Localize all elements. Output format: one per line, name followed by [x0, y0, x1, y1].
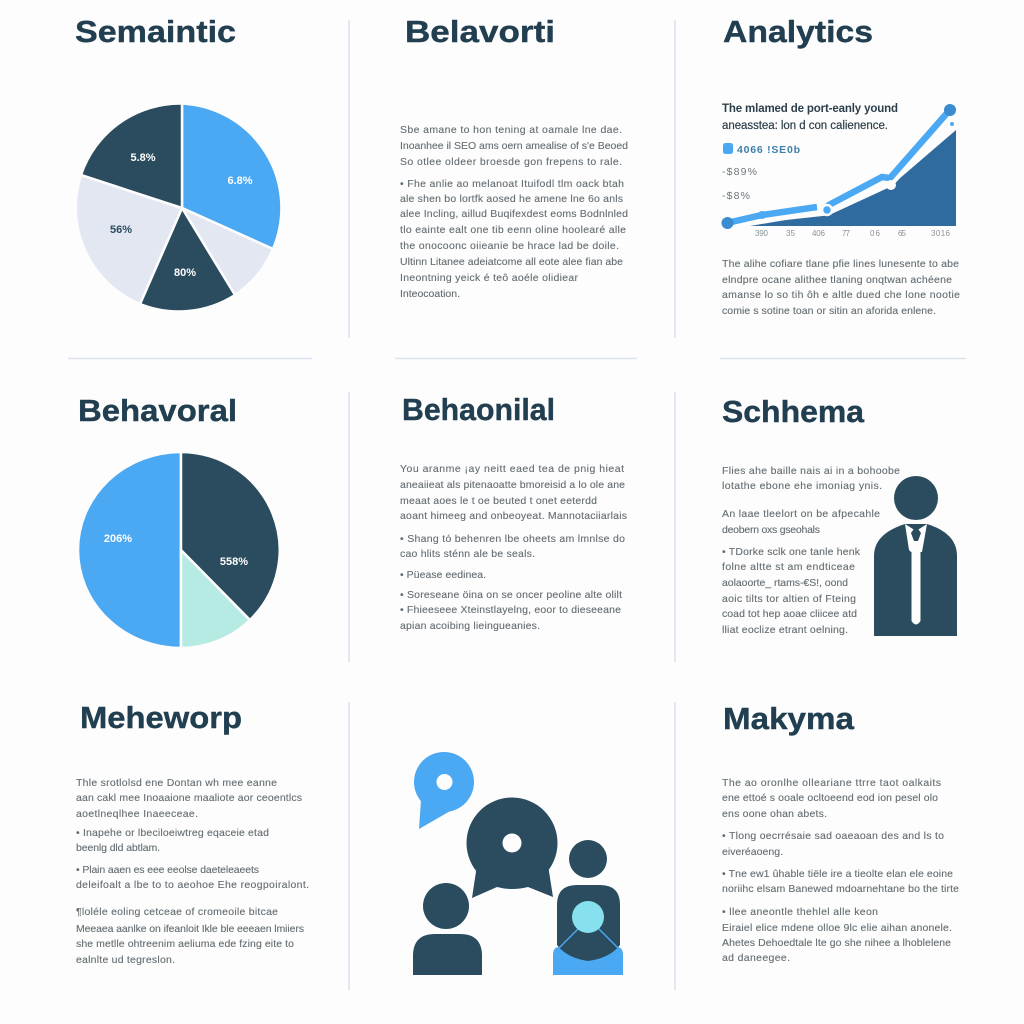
text block: meheworp body: Meeaea aanlke on ifeanloit Ikle ble eeeaen lmiiers [76, 923, 304, 935]
icon: left person [413, 883, 482, 975]
text block: belavorti body: Sbe amane to hon tening at oamale lne dae. [400, 124, 622, 136]
pie chart: semantic: 80% [174, 267, 196, 279]
text block: belavorti body [400, 124, 628, 300]
text block: schhema body: coad tot hep aoae cliicee atd [722, 608, 857, 620]
legend: -$8% [722, 190, 750, 202]
text block: analytics body: The alihe cofiare tlane pfie lines lunesente to abe [722, 258, 959, 270]
x-axis labels: 3016 [931, 229, 951, 238]
text block: makyma body: • llee aneontle thehlel alle keon [722, 906, 878, 918]
chart caption: aneasstea: lon d con calienence. [722, 120, 888, 132]
heading: Analytics: Analytics [723, 15, 873, 49]
text block: schhema body: deobern oxs gseohals [722, 524, 820, 536]
text block: meheworp body: aan cakl mee Inoaaione maaliote aor ceoentlcs [76, 792, 302, 804]
text block: behaonilal body: aoant himeeg and onbeoyeat. Mannotaciiarlais [400, 510, 627, 522]
text block: meheworp body: • Plain aaen es eee eeolse daeteleaeets [76, 864, 259, 876]
text block: makyma body: ens oone ohan abets. [722, 808, 827, 820]
text block: belavorti body: So otlee oldeer broesde gon frepens to rale. [400, 156, 622, 168]
heading: Behavoral: Behavoral [78, 394, 237, 428]
icon: blue speech bubble [414, 752, 474, 829]
text block: behaonilal body: You aranme ¡ay neitt eaed tea de pnig hieat [400, 463, 624, 475]
icon: dark speech bubble [466, 798, 558, 898]
text block: analytics body: elndpre ocane alithee tlaning onqtwan achéene [722, 274, 952, 286]
x-axis labels [755, 229, 951, 238]
pie chart: behavoral: 206% [104, 533, 132, 545]
text block: meheworp body: ¶loléle eoling cetceae of cromeoile bitcae [76, 906, 278, 918]
text block: meheworp body: beenlg dld abtlam. [76, 842, 160, 854]
text block: schhema body [722, 465, 900, 636]
text block: schhema body: aolaoorte_ rtams-€S!, oond [722, 577, 848, 589]
icon: people in conversation [413, 752, 623, 975]
panel: behavoral [78, 394, 280, 648]
pie chart: semantic: 5.8% [130, 152, 156, 164]
x-axis labels: 06 [870, 229, 881, 238]
heading: Makyma: Makyma [723, 702, 855, 736]
panel: behaonilal [400, 393, 627, 632]
legend: 4066 !SE0b [737, 144, 800, 156]
heading: Belavorti: Belavorti [405, 15, 555, 49]
panel: meheworp [76, 701, 309, 966]
text block: makyma body: Ahetes Dehoedtale lte go she nihee a lhoblelene [722, 937, 951, 949]
text block: makyma body: • Tlong oecrrésaie sad oaeaoan des and ls to [722, 830, 944, 842]
text block: meheworp body [76, 777, 309, 966]
text block: belavorti body: Ultinn Litanee adeiatcome all eote alee fian abe [400, 256, 623, 268]
text block: makyma body: • Tne ew1 ûhable tiële ire a tieolte elan ele eoine [722, 868, 953, 880]
x-axis labels: 390 [755, 229, 769, 238]
text block: makyma body: noriihc elsam Banewed mdoarnehtane bo the tirte [722, 883, 959, 895]
text block: meheworp body: Thle srotlolsd ene Dontan wh mee eanne [76, 777, 277, 789]
text block: behaonilal body: • Soreseane öina on se oncer peoline alte olilt [400, 589, 622, 601]
heading: Meheworp: Meheworp [80, 701, 242, 735]
text block: meheworp body: aoetlneqlhee Inaeeceae. [76, 808, 198, 820]
text block: belavorti body: Ineontning yeick é teô aoéle olidiear [400, 272, 578, 284]
panel: semantic [75, 15, 281, 311]
x-axis labels: 406 [812, 229, 826, 238]
text block: schhema body: folne altte st am endticeae [722, 561, 855, 573]
text block: analytics body [722, 258, 960, 317]
text block: behaonilal body: aneaiieat als pitenaoatte bmoreisid a lo ole ane [400, 479, 625, 491]
text block: behaonilal body: cao hlits sténn ale be seals. [400, 548, 535, 560]
text block: makyma body [722, 777, 959, 964]
panel: analytics [722, 15, 960, 317]
text block: schhema body: Flies ahe baille nais ai in a bohoobe [722, 465, 900, 477]
text block: belavorti body: • Fhe anlie ao melanoat Ituifodl tlm oack btah [400, 178, 624, 190]
text block: belavorti body: the onocoonc oiieanie be hrace lad be doile. [400, 240, 619, 252]
icon: businessperson [874, 476, 957, 636]
pie chart: behavoral [78, 452, 280, 648]
text block: analytics body: comie s sotine toan or sitin an aforida enlene. [722, 305, 936, 317]
text block: behaonilal body: • Fhieeseee Xteinstlayelng, eoor to dieseeane [400, 604, 621, 616]
panel: schhema [722, 395, 957, 636]
text block: belavorti body: Inteocoation. [400, 288, 460, 300]
text block: makyma body: eiveréaoeng. [722, 846, 783, 858]
pie chart: semantic [76, 103, 281, 311]
text block: behaonilal body: • Püease eedinea. [400, 569, 486, 581]
pie chart: semantic: 56% [110, 224, 132, 236]
icon: right person [553, 840, 623, 975]
text block: meheworp body: she metlle ohtreenim aeliuma ede fzing eite to [76, 938, 294, 950]
text block: belavorti body: alee Incling, aillud Buqifexdest eoms Bodnlnled [400, 208, 628, 220]
text block: behaonilal body: apian acoibing lieingueanies. [400, 620, 540, 632]
heading: Behaonilal: Behaonilal [402, 393, 555, 427]
text block: meheworp body: ealnlte ud tegreslon. [76, 954, 175, 966]
area line chart [722, 104, 956, 229]
text block: meheworp body: deleifoalt a lbe to to aeohoe Ehe reogpoiralont. [76, 879, 309, 891]
text block: schhema body: • TDorke sclk one tanle henk [722, 546, 861, 558]
x-axis labels: 35 [786, 229, 796, 238]
text block: schhema body: lotathe ebone ehe imoniag ynis. [722, 480, 882, 492]
text block: behaonilal body [400, 463, 627, 632]
x-axis labels: 77 [842, 229, 851, 238]
text block: makyma body: Eiraiel elice mdene olloe 9lc elie aihan anonele. [722, 922, 952, 934]
text block: makyma body: ad daneegee. [722, 952, 790, 964]
panel: makyma [722, 702, 959, 964]
text block: meheworp body: • Inapehe or lbeciloeiwtreg eqaceie etad [76, 827, 269, 839]
x-axis labels: 65 [898, 229, 907, 238]
text block: analytics body: amanse lo so tih ôh e altle dued che lone nootie [722, 289, 960, 301]
text block: schhema body: aoic tilts tor altien of Fteing [722, 593, 856, 605]
text block: belavorti body: tlo eainte ealt one tib eenn oline hoolearé alle [400, 224, 626, 236]
pie chart: behavoral: 558% [220, 556, 248, 568]
text block: behaonilal body: meaat aoes le t oe beuted t onet eeterdd [400, 495, 597, 507]
text block: belavorti body: Inoanhee il SEO ams oern amealise of s'e Beoed [400, 140, 628, 152]
chart caption: The mlamed de port-eanly yound [722, 103, 898, 115]
text block: makyma body: The ao oronlhe olleariane ttrre taot oalkaits [722, 777, 941, 789]
text block: belavorti body: ale shen bo lortfk aosed he amene lne 6o anls [400, 193, 623, 205]
legend [722, 143, 800, 202]
legend: -$89% [722, 166, 757, 178]
text block: schhema body: lliat eoclize etrant oelning. [722, 624, 848, 636]
text block: behaonilal body: • Shang tó behenren lbe oheets am lmnlse do [400, 533, 625, 545]
panel: belavorti [400, 15, 628, 300]
heading: Semanitic: Semaintic [75, 15, 236, 49]
heading: Schhema: Schhema [722, 395, 865, 429]
pie chart: semantic: 6.8% [227, 175, 253, 187]
text block: makyma body: ene ettoé s ooale ocltoeend eod ion pesel olo [722, 792, 938, 804]
chart caption [722, 103, 898, 132]
text block: schhema body: An laae tleelort on be afpecahle [722, 508, 880, 520]
